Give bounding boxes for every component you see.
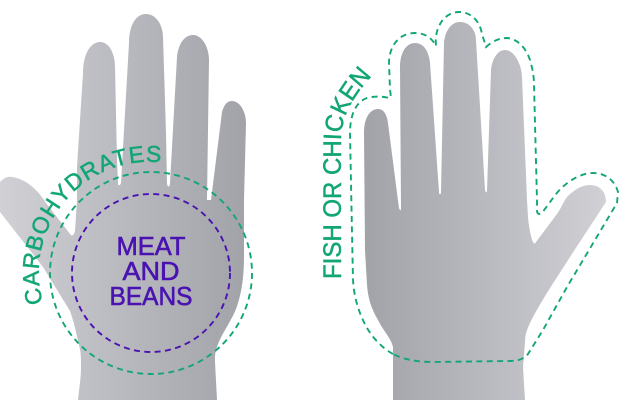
label: meat and beans: BEANS	[110, 281, 192, 311]
right hand silhouette	[364, 22, 606, 400]
label: meat and beans: MEAT	[116, 231, 186, 261]
left hand group	[0, 14, 253, 400]
label: meat and beans: AND	[122, 256, 180, 286]
green dashed outline: palm and fingers	[350, 12, 618, 362]
green dashed circle: carbohydrates	[50, 172, 252, 374]
curved label: carbohydrates: CARBOHYDRATES	[22, 146, 160, 304]
curved label: fish or chicken: FISH OR CHICKEN	[323, 66, 371, 278]
label: meat and beans	[110, 231, 192, 311]
purple dashed circle: meat and beans	[72, 194, 230, 352]
left hand silhouette	[0, 14, 246, 400]
